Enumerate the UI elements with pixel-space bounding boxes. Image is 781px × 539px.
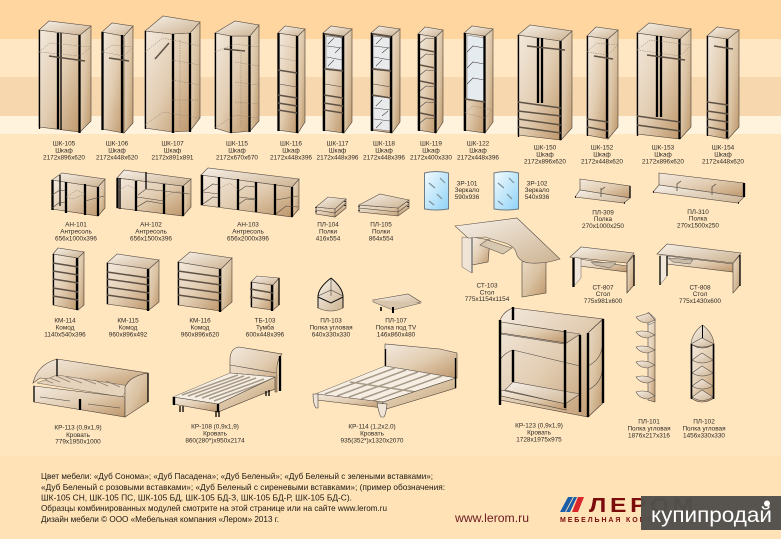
drawing	[107, 254, 159, 311]
mezzanine АН-102	[117, 170, 191, 242]
label: Кровать	[360, 430, 385, 437]
drawing	[323, 26, 352, 133]
bed КР-108	[173, 347, 282, 444]
label: Стол	[693, 291, 708, 298]
wardrobe ШК-107	[145, 16, 200, 161]
bookcase ШК-119	[410, 27, 452, 161]
logo	[560, 495, 697, 524]
label: Полка под TV	[376, 324, 417, 331]
drawing	[500, 307, 603, 417]
label: КМ-114	[54, 317, 76, 324]
wardrobe ШК-118	[363, 26, 405, 161]
label: 2172x896x620	[524, 158, 566, 165]
label: 1456x330x330	[683, 432, 725, 439]
label: Зеркало	[525, 187, 550, 194]
shelves ПЛ-104	[316, 197, 346, 242]
mirror ЗР-101	[424, 172, 480, 210]
label: 2172x896x620	[43, 154, 85, 161]
label: 2172x448x396	[363, 154, 405, 161]
watermark	[641, 496, 781, 530]
label: Шкаф	[654, 151, 672, 158]
drawing	[637, 23, 691, 139]
wardrobe ШК-115	[215, 21, 259, 161]
website: www.lerom.ru	[454, 512, 529, 525]
chest КМ-116	[178, 252, 232, 338]
drawing	[117, 170, 191, 216]
label: 2172x448x620	[581, 158, 623, 165]
TV shelf ПЛ-107	[373, 294, 421, 338]
label: ШК-150	[534, 144, 557, 151]
drawing	[653, 173, 744, 203]
label: Шкаф	[714, 151, 732, 158]
wardrobe ШК-106	[96, 23, 138, 161]
label: Шкаф	[108, 147, 126, 154]
label: Шкаф	[55, 147, 73, 154]
drawing	[250, 276, 279, 311]
nightstand ТБ-103	[246, 276, 285, 338]
label: ПЛ-107	[385, 317, 407, 324]
drawing	[145, 16, 200, 133]
label: СТ-807	[592, 284, 614, 291]
label: 2172x448x396	[270, 154, 312, 161]
watermark: купипродай	[651, 504, 772, 527]
label: Полка угловая	[309, 324, 353, 331]
label: ШК-122	[467, 140, 490, 147]
drawing	[215, 21, 259, 133]
label: 779x1950x1000	[55, 438, 101, 445]
shelf ПЛ-309	[575, 179, 630, 230]
mezzanine АН-103	[201, 168, 299, 242]
label: Шкаф	[329, 147, 346, 154]
label: Антресоль	[232, 228, 264, 235]
notes text block: Цвет мебели: «Дуб Сонома»; «Дуб Пасадена»; «Дуб Беленый»; «Дуб Беленый с зелеными вставками»;	[41, 471, 433, 481]
label: Стол	[596, 291, 611, 298]
label: 600x448x396	[246, 331, 285, 338]
wardrobe ШК-150	[518, 25, 572, 165]
label: 146x860x480	[377, 331, 416, 338]
wardrobe ШК-154	[702, 27, 744, 165]
drawing	[52, 173, 105, 216]
label: СТ-808	[689, 284, 711, 291]
label: ШК-154	[712, 144, 735, 151]
wardrobe ШК-152	[581, 27, 623, 165]
label: Комод	[119, 324, 138, 331]
label: АН-102	[140, 221, 162, 228]
drawing	[313, 344, 457, 417]
label: ПЛ-310	[687, 209, 709, 216]
label: 860(280*)x950x2174	[185, 437, 245, 444]
logo: МЕБЕЛЬНАЯ КОМПАНИЯ	[560, 517, 680, 524]
shelf ПЛ-310	[653, 173, 744, 229]
drawing	[53, 248, 84, 310]
drawing	[424, 172, 448, 210]
label: Тумба	[256, 323, 274, 331]
label: КР-108 (0,9x1,9)	[191, 423, 239, 430]
label: КР-114 (1,2x2,0)	[348, 423, 396, 430]
wardrobe ШК-122	[457, 26, 499, 161]
label: 1876x217x316	[628, 432, 670, 439]
chest КМ-114	[44, 248, 86, 338]
label: КР-123 (0,9x1,9)	[515, 422, 563, 429]
label: Шкаф	[593, 151, 611, 158]
label: 656x1000x396	[55, 235, 97, 242]
label: 270x1000x250	[582, 223, 624, 230]
label: Полка	[689, 215, 708, 222]
drawing	[371, 26, 400, 133]
wardrobe ШК-153	[637, 23, 691, 165]
drawing	[373, 294, 421, 313]
label: 864x554	[369, 235, 394, 242]
label: ЗР-102	[527, 180, 548, 187]
drawing	[570, 247, 634, 293]
label: ПЛ-101	[638, 418, 660, 425]
label: 270x1500x250	[677, 222, 719, 229]
notes text block: ШК-105 СН, ШК-105 ПС, ШК-105 БД, ШК-105 БД-З, ШК-105 БД-Р, ШК-105 БД-С).	[41, 492, 352, 502]
label: 2172x448x396	[457, 154, 499, 161]
notes text block: «Дуб Беленый с розовыми вставками»; «Дуб Беленый с сиреневыми вставками»; (пример обозначения:	[41, 482, 445, 492]
label: ПЛ-103	[320, 317, 342, 324]
wardrobe ШК-105	[39, 21, 91, 161]
drawing	[278, 26, 305, 133]
notes text block: Образцы комбинированных модулей смотрите на этой странице или на сайте www.lerom.ru	[41, 503, 387, 513]
drawing	[657, 244, 741, 293]
label: Полка	[594, 216, 613, 223]
drawing	[316, 197, 346, 217]
label: КМ-116	[189, 317, 211, 324]
label: Шкаф	[469, 147, 487, 154]
label: 416x554	[316, 235, 341, 242]
label: 2172x896x620	[642, 158, 684, 165]
label: 775x981x600	[584, 298, 623, 305]
label: 1728x1975x975	[516, 436, 562, 443]
label: 1140x540x396	[44, 331, 86, 338]
desk СТ-807	[570, 247, 634, 305]
corner shelf ПЛ-101	[627, 312, 671, 439]
logo: ЛЕРОМ	[589, 495, 697, 517]
label: Кровать	[66, 432, 91, 439]
label: Шкаф	[422, 147, 440, 154]
label: 656x2000x396	[227, 235, 269, 242]
drawing	[201, 168, 299, 217]
drawing	[455, 218, 560, 297]
label: 2172x448x396	[317, 154, 359, 161]
shelves ПЛ-105	[359, 194, 409, 242]
label: Полки	[372, 228, 390, 235]
label: Кровать	[527, 429, 552, 436]
label: Шкаф	[282, 147, 300, 154]
chest КМ-115	[107, 254, 159, 338]
drawing	[494, 172, 518, 210]
notes text block: Дизайн мебели © ООО «Мебельная компания «Лером» 2013 г.	[41, 514, 279, 524]
drawing	[418, 27, 443, 133]
drawing	[518, 25, 572, 140]
drawing	[33, 359, 148, 417]
notes text block	[41, 471, 445, 524]
label: Антресоль	[135, 228, 167, 235]
label: 775x1430x600	[679, 298, 721, 305]
label: ЗР-101	[457, 180, 478, 187]
drawing	[575, 179, 630, 203]
label: 540x936	[525, 194, 550, 201]
bed КР-113	[33, 359, 148, 445]
drawing	[178, 252, 232, 312]
drawing	[587, 27, 618, 139]
mirror ЗР-102	[494, 172, 550, 210]
drawing	[359, 194, 409, 216]
drawing	[691, 325, 714, 402]
bunk bed КР-123	[500, 307, 603, 443]
label: Шкаф	[164, 147, 181, 154]
label: Шкаф	[536, 151, 554, 158]
label: ШК-117	[327, 140, 349, 147]
drawing	[318, 278, 343, 311]
label: Зеркало	[455, 187, 480, 194]
label: 2172x448x620	[96, 154, 138, 161]
drawing	[102, 23, 133, 133]
label: ШК-153	[652, 144, 675, 151]
corner shelf ПЛ-103	[309, 278, 353, 338]
label: ШК-115	[226, 140, 248, 147]
drawing	[707, 27, 739, 139]
label: Шкаф	[228, 147, 246, 154]
label: АН-103	[237, 221, 259, 228]
desk СТ-808	[657, 244, 741, 305]
label: Шкаф	[375, 147, 393, 154]
bed КР-114	[313, 344, 457, 444]
label: 656x1500x396	[130, 235, 172, 242]
label: 640x330x330	[312, 331, 351, 338]
wardrobe ШК-117	[317, 26, 359, 161]
desk СТ-103	[455, 218, 560, 303]
label: ШК-105	[53, 140, 76, 147]
label: ШК-118	[373, 140, 395, 147]
label: Полки	[319, 228, 337, 235]
label: ШК-116	[280, 140, 302, 147]
drawing	[39, 21, 91, 133]
label: 2172x448x620	[702, 158, 744, 165]
label: ПЛ-309	[592, 209, 614, 216]
label: Стол	[480, 289, 495, 296]
label: КР-113 (0,9x1,9)	[54, 424, 102, 431]
label: 2172x670x670	[216, 154, 258, 161]
label: 960x896x620	[181, 331, 220, 338]
label: Кровать	[203, 430, 228, 437]
label: 960x896x492	[109, 331, 148, 338]
label: 2172x400x330	[410, 154, 452, 161]
label: 935(352*)x1320x2070	[341, 437, 404, 444]
label: 775x1154x1154	[465, 296, 510, 303]
label: Антресоль	[60, 228, 92, 235]
label: ПЛ-102	[693, 418, 715, 425]
wardrobe ШК-116	[270, 26, 312, 161]
label: АН-101	[65, 221, 87, 228]
label: ТБ-103	[255, 317, 276, 324]
label: 590x936	[455, 194, 480, 201]
label: Комод	[56, 324, 75, 331]
label: 2172x891x891	[152, 154, 194, 161]
label: ПЛ-105	[370, 221, 392, 228]
corner shelf ПЛ-102	[682, 325, 726, 439]
label: СТ-103	[476, 282, 498, 289]
label: Полка угловая	[627, 425, 671, 432]
label: ШК-107	[161, 140, 184, 147]
label: ШК-106	[106, 140, 129, 147]
label: КМ-115	[117, 317, 139, 324]
mezzanine АН-101	[52, 173, 105, 242]
drawing	[173, 347, 282, 417]
label: Комод	[191, 324, 210, 331]
label: ШК-152	[591, 144, 614, 151]
drawing	[464, 26, 493, 133]
label: ПЛ-104	[317, 221, 339, 228]
label: Полка угловая	[682, 425, 726, 432]
label: ШК-119	[420, 140, 442, 147]
drawing	[636, 312, 655, 402]
